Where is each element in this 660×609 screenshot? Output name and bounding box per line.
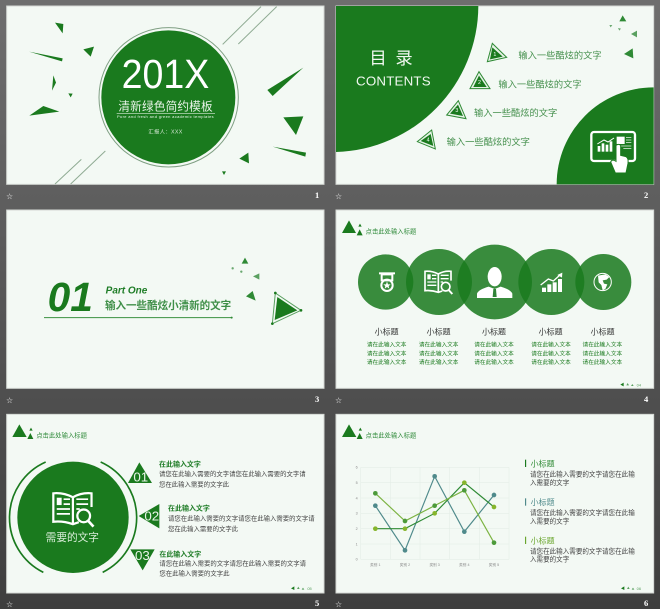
item 1 xyxy=(487,43,602,62)
legend text 3 xyxy=(525,535,635,564)
slide footers: stars and page numbers: 3 xyxy=(315,394,319,404)
line chart: 类别 2 xyxy=(400,562,410,567)
column text: 请在此输入文本 xyxy=(531,340,571,348)
point 3 xyxy=(130,548,307,578)
icon: book xyxy=(425,271,452,294)
column text: 请在此输入文本 xyxy=(583,358,622,366)
circle label: 需要的文字 xyxy=(46,531,99,544)
legend text 3: 入需要的文字 xyxy=(530,555,570,564)
footer mark xyxy=(621,586,642,591)
point 3: 您在此输入需要的文字此 xyxy=(159,569,230,578)
column text xyxy=(367,340,622,366)
point 1: 请您在此输入需要的文字请您在此输入需要的文字请 xyxy=(159,469,306,478)
footer mark: 04 xyxy=(637,382,642,387)
slide footers: stars and page numbers: 1 xyxy=(315,190,319,200)
slide footers: stars and page numbers: ☆ xyxy=(6,396,13,405)
legend text 2: 入需要的文字 xyxy=(530,516,570,525)
legend text 3: 请您在此输入需要的文字请您在此输 xyxy=(530,546,635,555)
slide footers: stars and page numbers xyxy=(6,190,649,609)
main circle xyxy=(17,462,129,573)
footer mark xyxy=(291,586,313,591)
line chart: 类别 5 xyxy=(489,562,499,567)
point 1: 您在此输入需要的文字此 xyxy=(159,479,230,488)
panel: slide 6 line chart xyxy=(336,414,654,593)
point 1: 在此输入文字 xyxy=(159,459,201,468)
decorative triangles xyxy=(29,23,306,175)
panel: slide 3 section xyxy=(7,210,324,388)
footer mark: 05 xyxy=(307,586,313,591)
column text: 请在此输入文本 xyxy=(419,358,459,366)
slide footers: stars and page numbers: ☆ xyxy=(335,600,342,609)
heading: CONTENTS: CONTENTS xyxy=(356,73,431,88)
column text: 请在此输入文本 xyxy=(367,358,407,366)
point 2: 您在此输入需要的文字此 xyxy=(168,524,239,533)
slide footers: stars and page numbers: ☆ xyxy=(335,396,342,405)
subtitle rule xyxy=(117,112,215,114)
item 3 xyxy=(447,101,557,119)
column text: 请在此输入文本 xyxy=(531,349,571,357)
panel: slide 2 contents xyxy=(336,6,654,184)
column labels: 小标题 xyxy=(427,327,451,337)
header: 点击此处输入标题 xyxy=(36,431,88,440)
point 2: 请您在此输入需要的文字请您在此输入需要的文字请 xyxy=(168,514,315,523)
diagonal lines xyxy=(55,7,277,184)
point 2: 02 xyxy=(144,509,159,524)
icon: growth chart xyxy=(541,273,562,292)
item 2 xyxy=(470,72,582,89)
cover circle xyxy=(99,28,238,167)
column text: 请在此输入文本 xyxy=(531,358,571,366)
slide footers: stars and page numbers: 2 xyxy=(644,190,648,200)
item 2: 输入一些酷炫的文字 xyxy=(498,78,582,89)
point 1 xyxy=(128,459,306,488)
header xyxy=(342,424,417,440)
item 4 xyxy=(417,130,530,149)
panel: slide 4 five circles xyxy=(336,210,654,388)
column text: 请在此输入文本 xyxy=(367,340,407,348)
line chart: 类别 4 xyxy=(459,562,470,567)
line chart: 类别 3 xyxy=(429,562,440,567)
column text: 请在此输入文本 xyxy=(419,340,459,348)
column text: 请在此输入文本 xyxy=(419,349,459,357)
slide footers: stars and page numbers: ☆ xyxy=(6,600,13,609)
green quarter circle xyxy=(336,6,478,152)
item 1: 1 xyxy=(493,52,496,58)
item 3: 3 xyxy=(455,108,458,114)
panel: slide 1 cover xyxy=(7,6,324,184)
section number: 01 xyxy=(48,274,93,320)
legend text 2 xyxy=(525,497,635,525)
header: 点击此处输入标题 xyxy=(366,227,417,236)
arcs xyxy=(9,462,137,572)
title: 201X: 201X xyxy=(122,51,209,97)
heading: 目录: 目录 xyxy=(369,48,421,68)
slide footers: stars and page numbers: 5 xyxy=(315,598,319,608)
line chart: 类别 1 xyxy=(370,562,381,567)
legend text 1: 入需要的文字 xyxy=(530,478,570,487)
column labels: 小标题 xyxy=(539,327,563,337)
line chart: 1 xyxy=(356,542,358,546)
column text: 请在此输入文本 xyxy=(474,349,514,357)
header xyxy=(342,220,417,236)
icon: book xyxy=(53,493,93,527)
point 2 xyxy=(139,504,315,533)
item 4: 输入一些酷炫的文字 xyxy=(447,136,530,147)
icon: globe xyxy=(594,273,611,291)
line chart: 3 xyxy=(356,512,358,516)
footer mark xyxy=(620,382,642,387)
play triangle xyxy=(271,292,302,325)
column labels: 小标题 xyxy=(482,327,506,337)
legend text 1: 小标题 xyxy=(531,458,555,468)
line chart xyxy=(356,466,509,567)
item 3: 输入一些酷炫的文字 xyxy=(474,107,557,118)
point 2: 在此输入文字 xyxy=(168,504,210,513)
subtitle: 清新绿色简约模板 xyxy=(118,100,213,114)
line chart: 6 xyxy=(356,466,358,470)
underline xyxy=(44,317,233,319)
point 1: 01 xyxy=(133,470,148,485)
column text: 请在此输入文本 xyxy=(583,349,622,357)
slide footers: stars and page numbers: ☆ xyxy=(6,192,13,201)
slide footers: stars and page numbers: 6 xyxy=(644,598,648,608)
header: 点击此处输入标题 xyxy=(366,431,417,440)
column text: 请在此输入文本 xyxy=(474,358,514,366)
line chart: 5 xyxy=(356,481,358,485)
slide footers: stars and page numbers: ☆ xyxy=(335,192,342,201)
line chart: 0 xyxy=(356,558,358,562)
slide footers: stars and page numbers: 4 xyxy=(644,394,649,404)
column labels: 小标题 xyxy=(591,327,615,337)
column text: 请在此输入文本 xyxy=(583,340,622,348)
english subtitle: Pure and fresh and green academic templates xyxy=(117,114,214,119)
column labels: 小标题 xyxy=(375,327,399,337)
legend text 3: 小标题 xyxy=(531,535,555,545)
line chart: 2 xyxy=(356,527,358,531)
icon: medal xyxy=(379,272,395,291)
point 3: 在此输入文字 xyxy=(159,549,201,558)
part label: Part One xyxy=(106,286,148,297)
section title: 输入一些酷炫小清新的文字 xyxy=(105,299,231,312)
reporter: 汇报人：XXX xyxy=(148,128,183,136)
point 3: 请您在此输入需要的文字请您在此输入需要的文字请 xyxy=(159,558,307,567)
item 1: 输入一些酷炫的文字 xyxy=(518,49,602,60)
bottom right quarter circle xyxy=(557,87,654,184)
legend text 2: 请您在此输入需要的文字请您在此输 xyxy=(530,508,635,517)
icon: person xyxy=(477,267,512,298)
legend text 1 xyxy=(525,458,635,487)
point 3: 03 xyxy=(135,548,150,563)
small triangles xyxy=(231,258,259,301)
column labels xyxy=(375,327,615,337)
line chart: 4 xyxy=(356,496,358,500)
column text: 请在此输入文本 xyxy=(474,340,514,348)
circles xyxy=(358,245,631,319)
legend text 2: 小标题 xyxy=(531,497,555,507)
item 2: 2 xyxy=(478,80,481,86)
panel: slide 5 three points xyxy=(7,414,324,593)
column text: 请在此输入文本 xyxy=(367,349,407,357)
legend text 1: 请您在此输入需要的文字请您在此输 xyxy=(530,469,635,478)
footer mark: 06 xyxy=(637,586,642,591)
header xyxy=(12,424,88,440)
item 4: 4 xyxy=(427,138,430,144)
icon: tablet with hand xyxy=(591,132,635,173)
small triangles xyxy=(609,15,637,58)
